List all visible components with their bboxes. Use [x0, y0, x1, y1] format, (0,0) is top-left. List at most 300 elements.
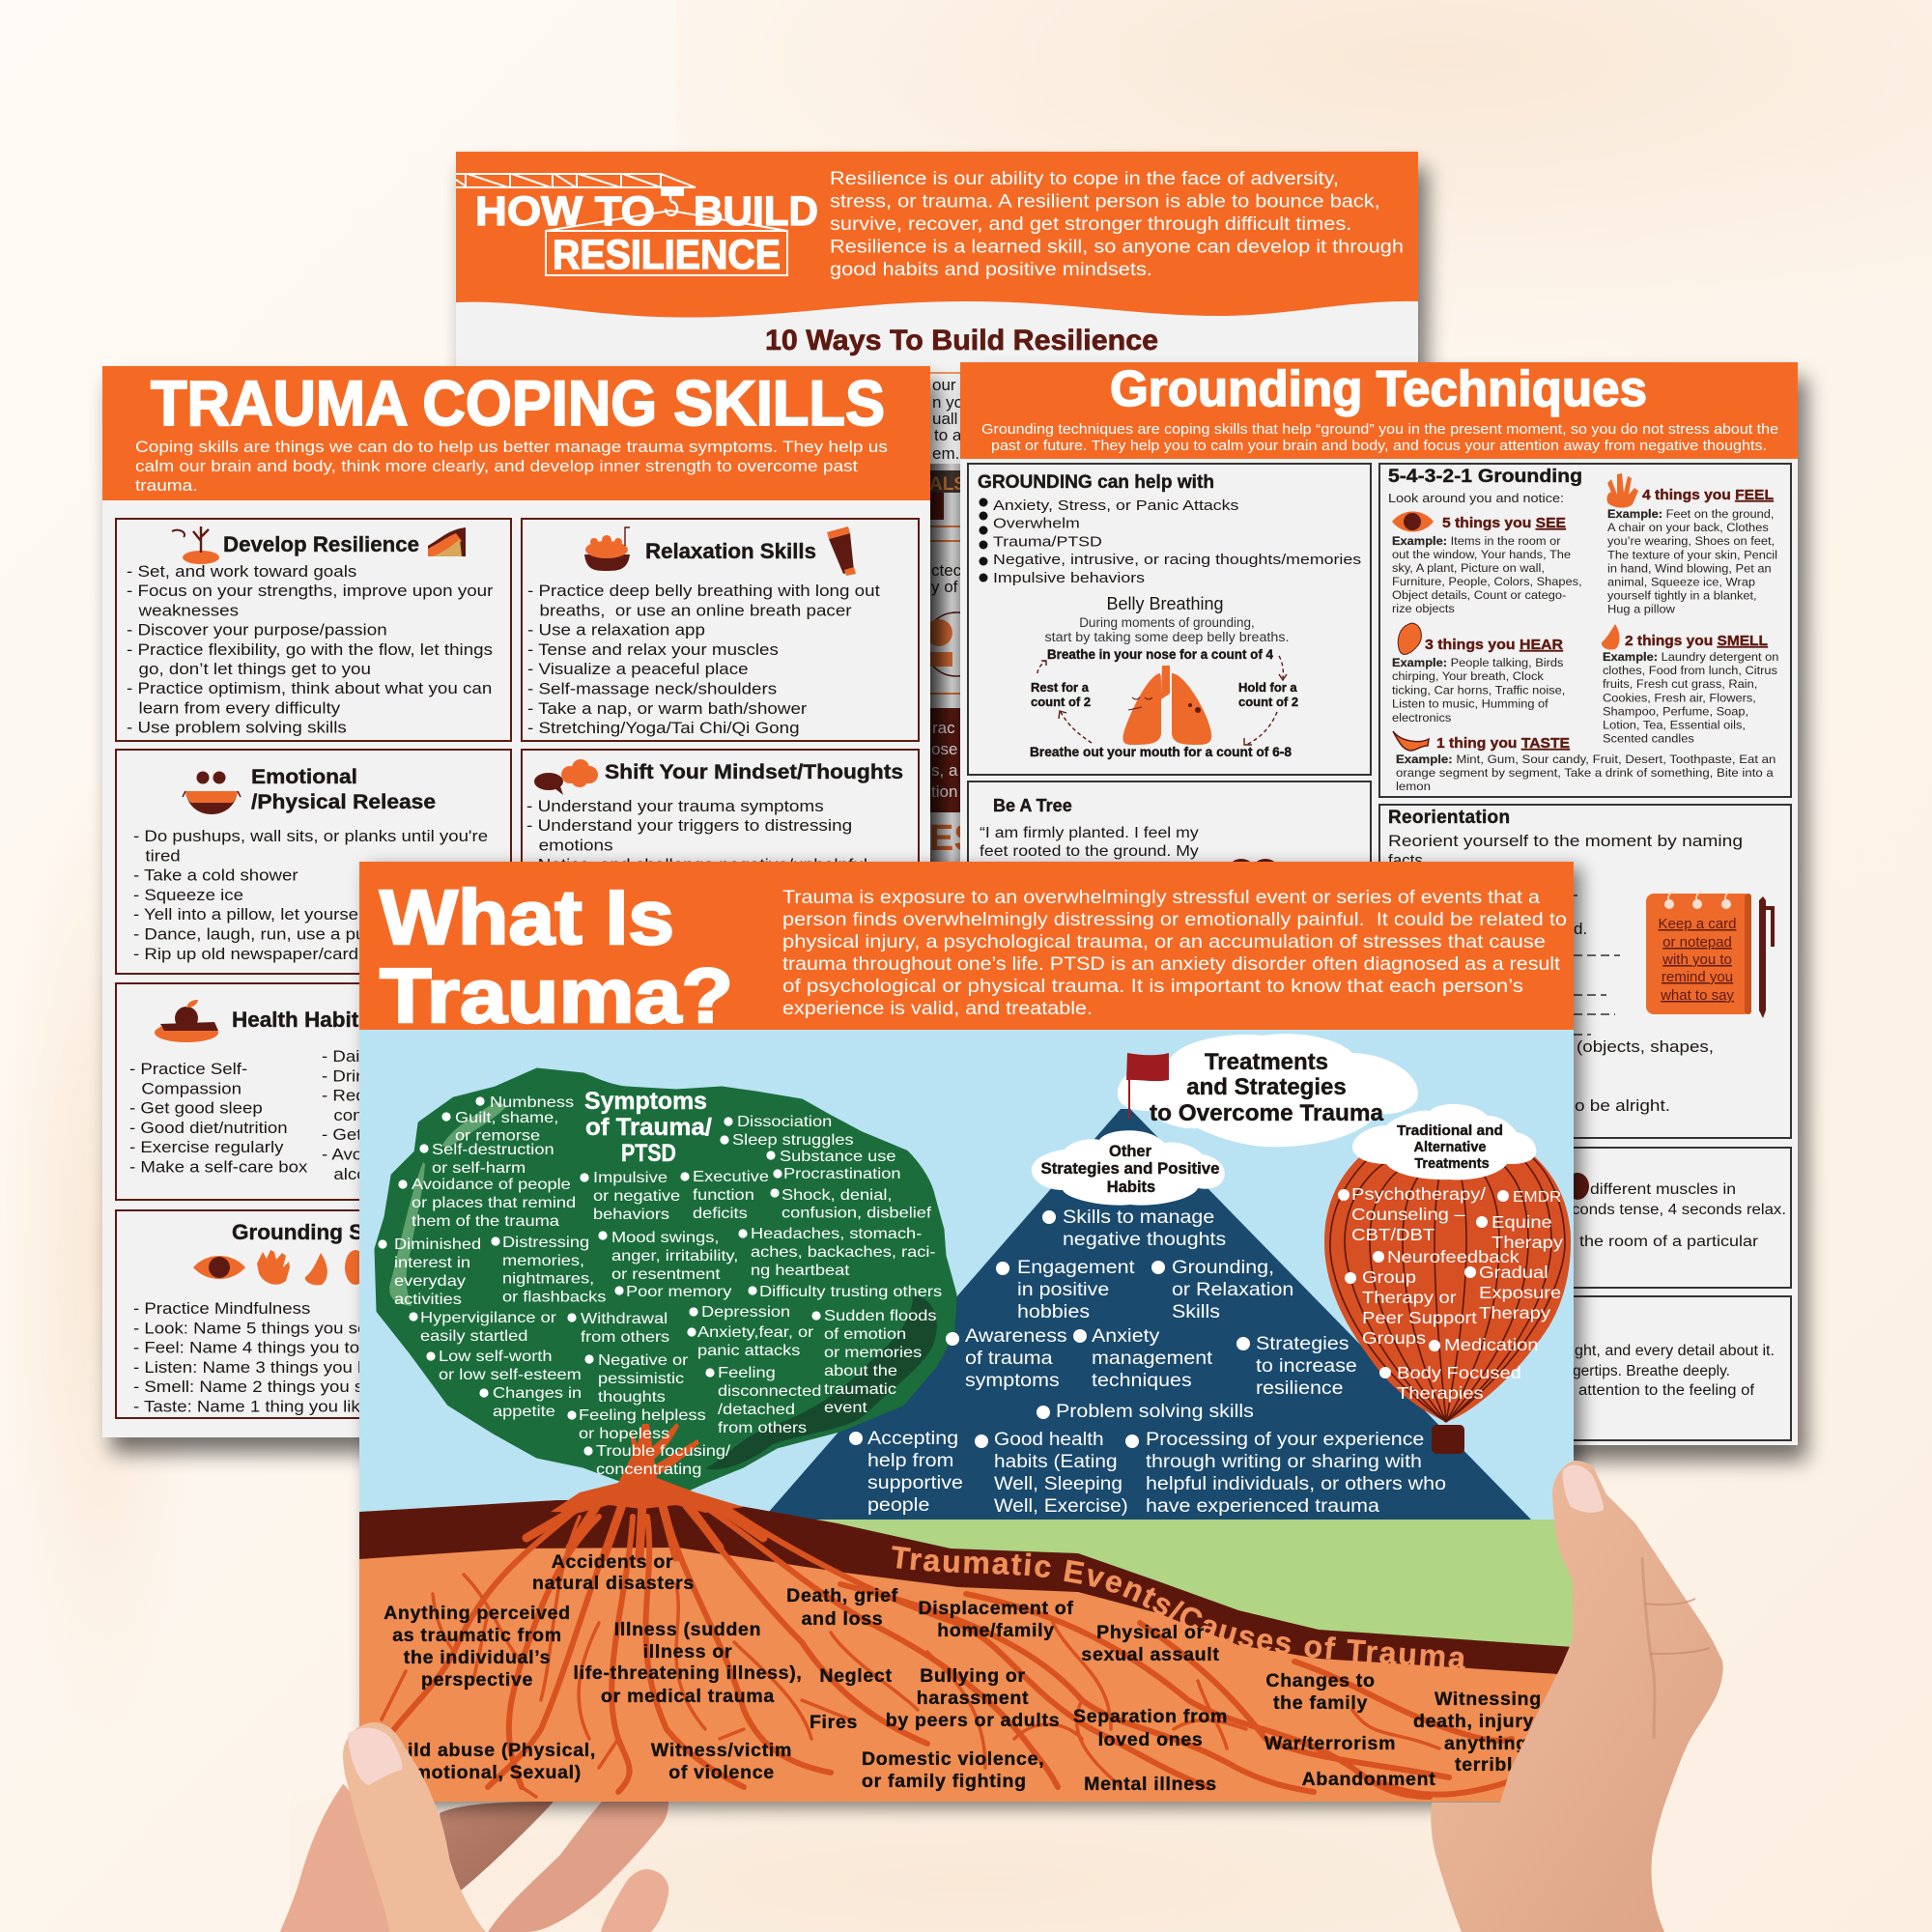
crown highlights	[389, 1101, 507, 1306]
mountain strategies text: have experienced trauma	[1146, 1495, 1380, 1517]
symptoms text: Trouble focusing/	[596, 1441, 730, 1460]
mountain strategies text: help from	[867, 1450, 953, 1471]
icon: balloon	[1324, 1121, 1571, 1454]
peek strip: resilience content between panels: our r	[932, 376, 966, 394]
feel examples: The texture of your skin, Pencil	[1607, 549, 1777, 561]
smell heading: 2 things you SMELL	[1625, 633, 1768, 649]
causes text: Death, grief	[786, 1585, 898, 1606]
trauma definition: person finds overwhelmingly distressing or emotionally painful. It could be related to	[782, 909, 1567, 930]
causes text: perspective	[421, 1669, 533, 1690]
causes text: Anything perceived	[384, 1603, 571, 1624]
icon: hand	[1606, 473, 1638, 508]
trauma coping description: trauma.	[135, 476, 197, 495]
dashed fill-in lines	[1574, 895, 1620, 1035]
relaxation list: - Practice deep belly breathing with long out	[527, 582, 880, 600]
causes text: Physical or	[1096, 1622, 1205, 1643]
be a tree text: “I am firmly planted. I feel my	[980, 824, 1199, 841]
taste heading: 1 thing you TASTE	[1436, 735, 1570, 752]
symptoms text: or hopeless	[579, 1424, 669, 1442]
causes text: terrible	[1455, 1754, 1524, 1776]
balloon treatments text: Psychotherapy/	[1351, 1185, 1487, 1205]
symptoms text: Withdrawal	[581, 1309, 668, 1327]
treatments heading: and Strategies	[1186, 1074, 1347, 1100]
breathing labels: Hold for a	[1238, 680, 1297, 695]
symptoms text: Procrastination	[783, 1164, 901, 1182]
causes text: Emotional, Sexual)	[401, 1762, 582, 1783]
symptoms text: interest in	[394, 1253, 470, 1271]
causes text: or family fighting	[862, 1771, 1027, 1792]
mountain strategies text: symptoms	[965, 1370, 1060, 1391]
symptoms text: Anxiety,fear, or	[697, 1322, 814, 1341]
symptoms text: nightmares,	[502, 1269, 594, 1287]
health left list: - Good diet/nutrition	[129, 1119, 288, 1137]
box: emotional physical release	[116, 750, 511, 974]
resilience description: survive, recover, and get stronger through difficult times.	[830, 214, 1351, 235]
resilience orange header	[456, 152, 1418, 318]
list: Impulsive behaviors	[993, 570, 1145, 585]
resilience logo title: HOW TO	[475, 188, 655, 235]
emotional heading: Emotional	[251, 766, 357, 788]
reorientation text: d.	[1574, 920, 1587, 938]
mountain strategies text: negative thoughts	[1063, 1229, 1226, 1250]
mindset list: emotions	[539, 837, 613, 854]
health right list: - Drink water	[322, 1066, 424, 1085]
symptoms text: or low self-esteem	[439, 1365, 582, 1383]
grounding description: Grounding techniques are coping skills that help “ground” you in the present moment, so you do not stress about the	[981, 422, 1778, 438]
symptoms text: from others	[581, 1327, 669, 1346]
traditional treatments heading: Treatments	[1414, 1156, 1490, 1172]
muscle text	[1572, 1181, 1786, 1250]
relaxation list: - Visualize a peaceful place	[527, 660, 749, 678]
heading: symptoms	[584, 1088, 712, 1167]
smell examples: Example:	[1603, 650, 1658, 664]
panel: what is trauma	[355, 855, 1594, 1820]
smell examples: Cookies, Fresh air, Flowers,	[1603, 692, 1756, 704]
reorientation text: facts	[1388, 851, 1423, 869]
symptoms text: or places that remind	[412, 1193, 576, 1211]
mountain strategies text: Well, Sleeping	[994, 1474, 1122, 1494]
relaxation list: - Tense and relax your muscles	[527, 640, 779, 659]
icon: eye	[1392, 512, 1434, 531]
detail text: ght, and every detail about it.	[1575, 1343, 1775, 1359]
smell examples: Lotion, Tea, Essential oils,	[1603, 719, 1746, 731]
emotional heading: /Physical Release	[251, 791, 436, 813]
trauma coping description: calm our brain and body, think more clearly, and develop inner strength to overcome past	[135, 457, 858, 475]
symptoms text: Depression	[701, 1302, 790, 1321]
develop resilience list: weaknesses	[137, 601, 239, 619]
health right list: - Get outside	[322, 1125, 425, 1144]
causes text: death, injury, or	[1413, 1711, 1565, 1732]
mountain strategies text: or Relaxation	[1172, 1279, 1293, 1300]
symptoms text: Distressing	[502, 1233, 589, 1251]
develop resilience list: - Practice optimism, think about what you can	[127, 679, 492, 697]
notepad text: with you to	[1662, 952, 1732, 968]
mountain strategies text: habits (Eating	[994, 1452, 1118, 1472]
balloon treatments text: Groups	[1362, 1329, 1426, 1349]
taste examples: lemon	[1396, 781, 1431, 793]
be a tree heading: Be A Tree	[993, 796, 1072, 815]
icon: speech and thought bubbles	[534, 759, 598, 795]
notepad text: what to say	[1660, 987, 1734, 1004]
symptoms text: ng heartbeat	[751, 1261, 850, 1279]
mountain strategies text: Accepting	[867, 1428, 958, 1449]
emotional list: - Take a cold shower	[133, 867, 298, 884]
notepad text: Keep a card	[1659, 916, 1736, 932]
smell examples: Laundry detergent on	[1658, 650, 1779, 664]
symptoms text: panic attacks	[697, 1341, 800, 1359]
balloon treatments text: Therapies	[1397, 1384, 1484, 1404]
mountain strategies text: of trauma	[965, 1348, 1053, 1369]
hook block	[661, 188, 684, 196]
peek strip: resilience content between panels: ES	[929, 818, 979, 859]
reorientation text	[1388, 832, 1743, 1115]
icon: bathtub	[584, 527, 630, 571]
symptoms text: Feeling	[718, 1363, 776, 1381]
symptoms text: of emotion	[824, 1324, 906, 1343]
emotional list: - Yell into a pillow, let yourself scream	[133, 905, 432, 923]
reorientation text: (objects, shapes,	[1577, 1037, 1714, 1056]
reorientation text: Reorient yourself to the moment by naming	[1388, 832, 1743, 850]
relaxation heading: Relaxation Skills	[645, 539, 816, 563]
feel heading: 4 things you FEEL	[1642, 487, 1774, 503]
hear examples: People talking, Birds	[1447, 656, 1563, 669]
belly breathing intro: During moments of grounding,	[1079, 615, 1255, 630]
mountain strategies text: resilience	[1256, 1378, 1344, 1399]
resilience description: good habits and positive mindsets.	[830, 260, 1152, 280]
icon: laughing face	[183, 771, 241, 814]
list: Trauma/PTSD	[993, 534, 1102, 550]
mountain strategies text: Processing of your experience	[1146, 1429, 1424, 1450]
right thumb shading	[1642, 1557, 1655, 1739]
resilience description: Resilience is our ability to cope in the face of adversity,	[830, 169, 1339, 189]
balloon treatments text: Peer Support	[1362, 1309, 1478, 1328]
right thumbnail	[1563, 1464, 1604, 1513]
trauma definition: physical injury, a psychological trauma, or an accumulation of stresses that cause	[782, 931, 1546, 952]
tree crown	[377, 1070, 954, 1491]
trauma definition: Trauma is exposure to an overwhelmingly stressful event or series of events that a	[782, 887, 1540, 908]
trauma definition: experience is valid, and treatable.	[782, 998, 1093, 1019]
roots	[382, 1507, 1521, 1797]
relaxation list: breaths, or use an online breath pacer	[540, 601, 852, 619]
symptoms text: function	[693, 1185, 754, 1204]
heading: symptoms: of Trauma/	[585, 1114, 712, 1141]
grounding skills list: - Smell: Name 2 things you smell	[133, 1378, 396, 1396]
trauma title: What Is	[380, 874, 674, 960]
causes text: Witnessing	[1435, 1689, 1542, 1710]
box heading: GROUNDING can help with	[978, 472, 1214, 493]
causes text: Displacement of	[918, 1598, 1074, 1619]
symptoms text: Diminished	[394, 1235, 481, 1253]
symptoms text: from others	[718, 1418, 807, 1436]
develop resilience heading: Develop Resilience	[223, 532, 419, 556]
symptoms text: Headaches, stomach-	[751, 1224, 922, 1242]
symptoms text: Dissociation	[737, 1112, 832, 1130]
mountain strategies text: Strategies	[1256, 1333, 1350, 1354]
symptoms text: about the	[824, 1361, 897, 1379]
causes text: or medical trauma	[601, 1686, 775, 1707]
emotional list: - Do pushups, wall sits, or planks until you're	[133, 827, 488, 845]
be a tree text: feet rooted to the ground. My	[980, 842, 1199, 860]
notepad text: or notepad	[1662, 934, 1732, 951]
resilience logo title: RESILIENCE	[553, 232, 781, 278]
taste examples: Mint, Gum, Sour candy, Fruit, Desert, Toothpaste, Eat an	[1453, 753, 1776, 766]
symptoms text: Substance use	[780, 1147, 896, 1165]
icon: sprout	[172, 526, 219, 564]
panel: trauma coping skills	[102, 366, 930, 1437]
causes text: home/family	[937, 1620, 1055, 1641]
box: health habits	[116, 983, 511, 1200]
feel examples: animal, Squeeze ice, Wrap	[1607, 576, 1755, 588]
causes text: the family	[1273, 1692, 1368, 1714]
peek strip: resilience content between panels: ose	[931, 740, 957, 758]
balloon basket	[1432, 1425, 1464, 1454]
hands behind poster: left fingers	[440, 1802, 668, 1932]
balloon treatments text: Body Focused	[1397, 1364, 1521, 1383]
peek strip: resilience content between panels: em.	[932, 444, 959, 463]
health right list: alcohol	[333, 1165, 390, 1183]
symptoms text: Shock, denial,	[781, 1185, 892, 1204]
symptoms text: or self-harm	[432, 1158, 526, 1177]
feel examples: Hug a pillow	[1607, 603, 1675, 616]
symptoms text: or resentment	[611, 1264, 721, 1283]
causes text: Bullying or	[920, 1665, 1026, 1687]
cloud: treatments and strategies	[1118, 1034, 1418, 1147]
symptoms text: concentrating	[596, 1460, 701, 1478]
heading: symptoms: PTSD	[621, 1140, 676, 1167]
health habits heading: Health Habits	[232, 1008, 371, 1032]
detail text	[1573, 1343, 1775, 1399]
balloon treatments text	[1351, 1185, 1563, 1404]
icon: food plate	[155, 1000, 218, 1042]
breathing labels: Rest for a	[1031, 680, 1090, 695]
peek strip: resilience content between panels: uall	[932, 410, 957, 428]
icon: flag	[1126, 1053, 1169, 1119]
peek strip: resilience content between panels: rac	[932, 719, 955, 737]
icon: crane and building outline	[456, 174, 787, 275]
grounding skills list: - Look: Name 5 things you see	[133, 1319, 378, 1337]
balloon treatments text: Medication	[1444, 1336, 1538, 1355]
causes text: Mental illness	[1084, 1774, 1217, 1795]
relaxation list: - Stretching/Yoga/Tai Chi/Qi Gong	[527, 719, 800, 737]
emotional list: - Squeeze ice	[133, 886, 243, 904]
soil dark band	[359, 1499, 1574, 1675]
other strategies heading	[1041, 1143, 1219, 1196]
causes text: of violence	[668, 1762, 775, 1783]
belly breathing heading: Belly Breathing	[1106, 594, 1224, 613]
causes text: and loss	[802, 1608, 883, 1630]
mountain strategies text: helpful individuals, or others who	[1146, 1473, 1446, 1494]
balloon treatments text: Gradual	[1479, 1264, 1548, 1283]
emotional list: tired	[145, 846, 181, 865]
balloon treatments text: Therapy	[1479, 1304, 1550, 1323]
health left list: - Exercise regularly	[129, 1138, 284, 1156]
relaxation list: - Take a nap, or warm bath/shower	[527, 699, 807, 718]
left index finger	[280, 1784, 396, 1932]
icon: lotion tube	[827, 526, 856, 576]
develop resilience list: go, don’t let things get to you	[139, 660, 371, 678]
mountain strategies text: Skills to manage	[1063, 1207, 1214, 1228]
balloon treatments text: Equine	[1492, 1213, 1552, 1233]
feel examples: Example:	[1607, 507, 1662, 521]
balloon treatments text: Therapy or	[1362, 1289, 1457, 1308]
trauma definition	[782, 887, 1567, 1019]
detail text: attention to the feeling of	[1578, 1382, 1755, 1399]
causes text: harassment	[917, 1688, 1029, 1709]
hear heading: 3 things you HEAR	[1425, 637, 1563, 653]
symptoms text: Impulsive	[593, 1168, 668, 1186]
causes text	[382, 1551, 1565, 1795]
icon: ear	[1398, 623, 1421, 654]
feel examples: in hand, Wind blowing, Pet an	[1607, 562, 1772, 575]
causes text: Abandonment	[1302, 1769, 1435, 1790]
box: muscle tension	[1379, 1148, 1791, 1288]
causes text: loved ones	[1098, 1729, 1203, 1750]
grounding skills heading: Grounding Skills	[232, 1220, 406, 1244]
peek strip: resilience content between panels: ctec	[931, 561, 962, 580]
mountain strategies text: Awareness	[965, 1325, 1067, 1347]
mountain strategies text	[867, 1207, 1446, 1517]
causes text: Illness (sudden	[614, 1619, 761, 1640]
symptoms text: everyday	[394, 1271, 466, 1290]
causes text: Fires	[810, 1712, 858, 1733]
treatments heading: Treatments	[1205, 1049, 1328, 1075]
causes text: anything	[1444, 1733, 1528, 1754]
hear examples: Example:	[1392, 656, 1447, 669]
grounding skills list: - Practice Mindfulness	[133, 1299, 311, 1318]
mountain strategies text: Problem solving skills	[1056, 1401, 1254, 1422]
icon: mountain climb	[428, 527, 466, 556]
box: shift your mindset	[522, 750, 919, 885]
heading: traumatic events: Traumatic Events/Causes of Trauma	[892, 1546, 1465, 1668]
mindset heading: Shift Your Mindset/Thoughts	[605, 760, 903, 783]
hear examples: chirping, Your breath, Clock	[1392, 670, 1545, 683]
grounding header	[960, 362, 1798, 459]
symptoms text: Avoidance of people	[412, 1175, 571, 1193]
taste examples: Example:	[1396, 753, 1453, 766]
grounding skills list: - Feel: Name 4 things you touch	[133, 1339, 388, 1356]
see examples: out the window, Your hands, The	[1392, 548, 1571, 561]
box: grounding skills	[116, 1210, 511, 1418]
left thumb	[343, 1722, 486, 1932]
box: be a tree	[968, 781, 1371, 975]
hear examples: electronics	[1392, 711, 1451, 724]
health left list: - Make a self-care box	[129, 1158, 308, 1176]
notepad text: remind you	[1662, 969, 1733, 985]
mountain strategies text: to increase	[1256, 1355, 1357, 1377]
right hand	[1431, 1461, 1723, 1932]
causes text: life-threatening illness),	[573, 1662, 803, 1684]
other strategies heading: Other	[1109, 1143, 1152, 1160]
box: develop resilience	[116, 519, 511, 741]
symptoms text: Mood swings,	[611, 1228, 719, 1246]
causes text: Separation from	[1073, 1706, 1228, 1727]
trauma coping title: TRAUMA COPING SKILLS	[151, 367, 885, 439]
emotional heading	[251, 766, 436, 813]
list: Anxiety, Stress, or Panic Attacks	[993, 497, 1238, 514]
trauma definition: trauma throughout one’s life. PTSD is an anxiety disorder often diagnosed as a result	[782, 953, 1561, 975]
symptoms text: memories,	[502, 1251, 584, 1269]
health left list: - Get good sleep	[129, 1099, 263, 1117]
resilience logo title: BUILD	[694, 188, 818, 235]
health right list: - Daily exercise	[322, 1047, 444, 1065]
heading: 10 ways: 10 Ways To Build Resilience	[765, 325, 1158, 356]
bullets	[980, 498, 987, 582]
mountain strategies text: Grounding,	[1172, 1257, 1274, 1278]
mindset list: - Understand your triggers to distressing	[526, 816, 852, 835]
symptoms text: deficits	[693, 1204, 748, 1222]
traditional treatments heading: Alternative	[1414, 1140, 1486, 1155]
breathing labels: Breathe out your mouth for a count of 6-8	[1030, 745, 1292, 759]
green hillside	[773, 1520, 1574, 1647]
relaxation list: - Self-massage neck/shoulders	[527, 680, 777, 697]
balloon treatments text: Counseling –	[1351, 1206, 1465, 1225]
develop resilience list: - Focus on your strengths, improve upon your	[127, 582, 494, 600]
emotional list: - Dance, laugh, run, use a punching bag	[133, 925, 453, 943]
see examples: Items in the room or	[1447, 534, 1561, 548]
breathing labels: count of 2	[1238, 695, 1298, 709]
box: relaxation skills	[522, 519, 919, 741]
mountain strategies text: people	[867, 1494, 929, 1516]
symptoms text: /detached	[718, 1400, 795, 1418]
5-4-3-2-1 heading: 5-4-3-2-1 Grounding	[1388, 467, 1582, 487]
symptoms text: Poor memory	[626, 1282, 732, 1300]
relaxation list: - Use a relaxation app	[527, 621, 705, 639]
cloud: traditional treatments	[1352, 1104, 1536, 1179]
balloon treatments text: Therapy	[1492, 1234, 1563, 1253]
peek strip: resilience content between panels: to a	[934, 426, 962, 444]
see examples: Furniture, People, Colors, Shapes,	[1392, 575, 1582, 588]
peek strip: resilience content between panels	[924, 367, 988, 862]
symptoms text: thoughts	[598, 1387, 666, 1406]
other strategies heading: Habits	[1107, 1179, 1155, 1196]
breathing labels	[1030, 647, 1298, 759]
belly breathing intro: start by taking some deep belly breaths.	[1045, 630, 1289, 644]
symptoms text: traumatic	[824, 1379, 896, 1398]
mountain strategies text: through writing or sharing with	[1146, 1451, 1422, 1472]
panel: grounding techniques	[960, 361, 1798, 1445]
hear examples: ticking, Car horns, Traffic noise,	[1392, 684, 1565, 696]
peek strip: resilience content between panels: n you	[932, 393, 973, 412]
grounding description: past or future. They help you to calm your brain and body, and focus your attention away from negative thoughts.	[991, 439, 1767, 454]
symptoms text: Sudden floods	[824, 1306, 937, 1324]
icon: lungs	[1122, 666, 1211, 745]
symptoms text: or negative	[593, 1186, 680, 1205]
mountain strategies text: Well, Exercise)	[994, 1496, 1128, 1517]
breathing labels: Breathe in your nose for a count of 4	[1047, 647, 1273, 662]
mountain strategies text: management	[1092, 1348, 1212, 1369]
see examples: Object details, Count or catego-	[1392, 588, 1566, 602]
trauma title: Trauma?	[380, 952, 733, 1038]
mountain strategies text: techniques	[1092, 1370, 1192, 1391]
symptoms text: Numbness	[490, 1093, 574, 1111]
intro: Look around you and notice:	[1388, 491, 1564, 505]
see examples: Example:	[1392, 534, 1447, 548]
icon: notepad	[1646, 892, 1751, 1014]
mountain bullets	[849, 1210, 1250, 1448]
mountain strategies text: hobbies	[1017, 1301, 1090, 1322]
health left list: Compassion	[141, 1079, 242, 1097]
mountain strategies text: supportive	[867, 1472, 963, 1493]
develop resilience list: - Practice flexibility, go with the flow, let things	[127, 640, 493, 659]
treatments heading	[1150, 1049, 1384, 1126]
reorientation text: o be alright.	[1575, 1096, 1670, 1115]
muscle text: the room of a particular	[1579, 1234, 1758, 1250]
cloud: other strategies	[1032, 1130, 1225, 1206]
box: reorientation	[1379, 805, 1791, 1138]
left hand	[280, 1722, 486, 1932]
muscle text: different muscles in	[1590, 1181, 1736, 1198]
develop resilience list: - Set, and work toward goals	[127, 562, 356, 581]
